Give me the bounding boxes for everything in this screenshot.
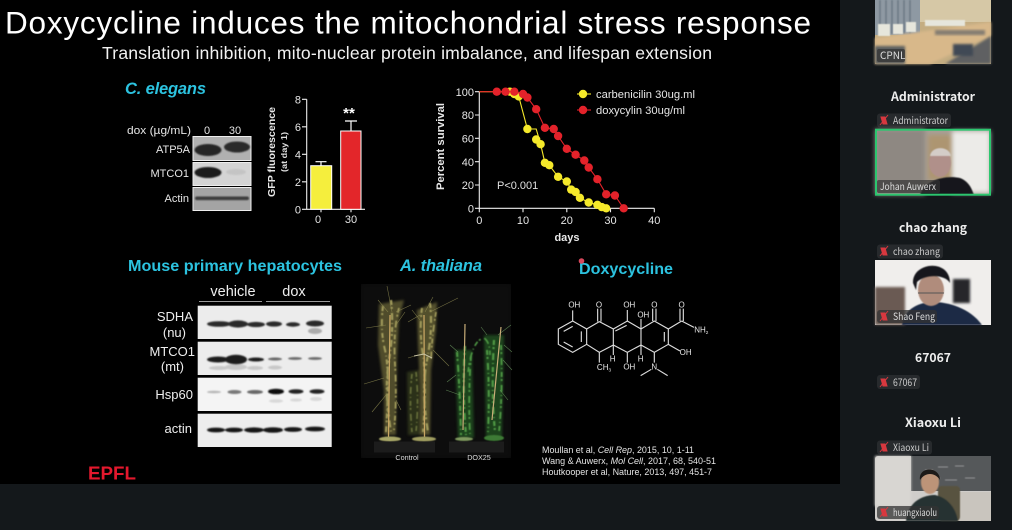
chemical structure: doxycycline [558,301,709,376]
atom labels: 2 [706,330,709,335]
reference 1: Moullan et al, Cell Rep, 2015, 10, 1-11 [542,445,694,455]
group label vehicle: vehicle [210,284,256,300]
participant tag: chao zhang: chao zhang [893,243,940,258]
participant tag: 67067: 67067 [893,374,917,389]
panel: C. elegans western blot [127,125,251,210]
series: doxycylin [479,88,628,212]
dose label: dox (µg/mL) [127,125,191,137]
bar 0 [311,166,332,209]
DOX25 plants [446,324,512,452]
error bar 30 [345,121,357,131]
x tick labels: 30 [345,214,357,226]
y tick labels: 60 [462,134,474,146]
participant tag: Xiaoxu Li [877,439,932,454]
laser pointer dot [579,258,584,264]
label DOX25: DOX25 [467,453,491,462]
soft foliage mass [378,300,437,435]
logo: EPFL: EPFL [88,462,136,483]
y tick labels: 4 [295,150,301,162]
y tick labels: 2 [295,177,301,189]
y tick labels: 8 [295,94,301,106]
bonds [558,309,694,376]
pots [449,442,504,452]
y tick labels: 100 [456,87,474,99]
dose 0: 0 [204,125,210,137]
y tick labels [456,87,474,216]
participant video: Johan Auwerx [875,129,991,195]
participant heading: Administrator: Administrator [890,86,976,105]
atom labels: NH [694,326,706,335]
rosettes [455,437,473,441]
rosettes [379,436,401,442]
x tick labels: 0 [315,214,321,226]
x tick labels [315,214,357,226]
pots [374,442,435,452]
dose 30: 30 [229,125,241,137]
atom labels: OH [680,348,692,357]
atom labels: H [638,355,644,364]
heading: Doxycycline: Doxycycline [579,261,673,278]
x tick labels: 0 [476,215,482,227]
reference 2: Wang & Auwerx, Mol Cell, 2017, 68, 540-51 [542,456,716,466]
label SDHA: SDHA [157,309,193,324]
x tick labels: 40 [648,215,660,227]
atom labels: H [610,355,616,364]
soft foliage mass [455,335,504,438]
slide background [0,0,840,484]
blot ATP5A [193,136,251,160]
survival chart [435,87,695,244]
reference 3: Houtkooper et al, Nature, 2013, 497, 451-7 [542,467,712,477]
legend: carbenicilin 30ug.ml [596,89,695,101]
label actin: actin [165,421,192,436]
y axis title: GFP fluorescence [267,107,278,197]
label MTCO1: MTCO1 [150,168,189,180]
control plants [364,286,458,452]
bar chart: GFP fluorescence [267,94,365,226]
title: Doxycycline induces the mitochondrial stress response [5,4,811,40]
twigs [446,325,512,400]
group label dox: dox [282,284,306,300]
y axis subtitle: (at day 1) [280,132,289,172]
x tick labels: 30 [604,215,617,227]
name tag CPNL: CPNL [880,47,906,62]
y tick labels [295,94,301,216]
twigs [364,286,458,412]
subtitle: Translation inhibition, mito-nuclear protein imbalance, and lifespan extension [102,43,712,63]
atom labels: O [679,301,685,310]
y tick labels: 0 [468,204,474,216]
name tag huangxiaolu: huangxiaolu [893,504,937,519]
x tick labels: 20 [561,215,573,227]
label Actin: Actin [165,193,189,205]
photo: A. thaliana plants [361,284,512,462]
atom labels: OH [568,301,581,310]
legend: doxycylin 30ug/ml [596,105,685,117]
textured foliage [382,300,436,432]
x tick labels [476,215,660,227]
heading: C. elegans: C. elegans [125,80,206,98]
group underlines [199,300,330,302]
participant video: CPNL [875,0,991,64]
heading: Mouse primary hepatocytes: Mouse primary hepatocytes [128,258,342,275]
label Control: Control [395,453,419,462]
label nu: (nu) [163,325,186,340]
participant video: huangxiaolu [875,456,991,521]
textured foliage [457,338,502,435]
atom labels: CH [597,363,608,372]
x axis title: days [554,232,580,244]
error bar 0 [316,162,326,166]
y tick labels: 6 [295,122,301,134]
axes [302,99,365,212]
y tick labels: 0 [295,204,301,216]
y tick labels: 40 [462,157,474,169]
series: carbenicilin [479,88,610,212]
participant tag: chao zhang [877,243,943,258]
atom labels: OH [623,362,636,371]
label MTCO1: MTCO1 [150,344,195,359]
label ATP5A: ATP5A [156,144,191,156]
blot MTCO1 [193,162,251,186]
atom labels: O [651,301,657,310]
y tick labels: 80 [462,110,474,122]
axes [475,92,654,212]
label mt: (mt) [161,359,184,374]
y axis title: Percent survival [435,103,447,190]
participant video: Shao Feng [875,260,991,325]
panel: hepatocyte western blots [150,284,332,447]
legend [577,89,695,117]
atom labels: N [651,362,657,371]
blot SDHA [198,306,332,339]
y tick labels: 20 [462,180,474,192]
blot actin [198,414,332,447]
ties [414,354,432,358]
stakes [388,315,424,437]
participant heading: chao zhang: chao zhang [899,217,968,236]
blot MTCO1 [198,342,332,375]
blot Hsp60 [198,378,332,411]
name tag Shao Feng: Shao Feng [893,308,935,323]
heading: A. thaliana: A. thaliana [399,257,482,275]
atom labels [568,301,709,372]
blot Actin [193,188,251,210]
atom labels: 3 [608,367,611,372]
bar 30 [341,131,361,209]
label Hsp60: Hsp60 [155,387,193,402]
atom labels: O [596,301,602,310]
participant tag: Xiaoxu Li: Xiaoxu Li [893,439,929,454]
references [542,445,716,477]
stakes [463,324,501,430]
participant tag: 67067 [877,374,920,389]
participant tag: Administrator: Administrator [893,112,948,127]
participant heading: Xiaoxu Li: Xiaoxu Li [905,412,961,431]
participant heading: 67067: 67067 [915,347,951,366]
name tag Johan Auwerx: Johan Auwerx [880,178,936,193]
significance: ** [343,105,355,122]
atom labels: OH [623,301,636,310]
atom labels: OH [637,310,650,319]
x tick labels: 10 [517,215,529,227]
p value: P<0.001 [497,180,538,192]
